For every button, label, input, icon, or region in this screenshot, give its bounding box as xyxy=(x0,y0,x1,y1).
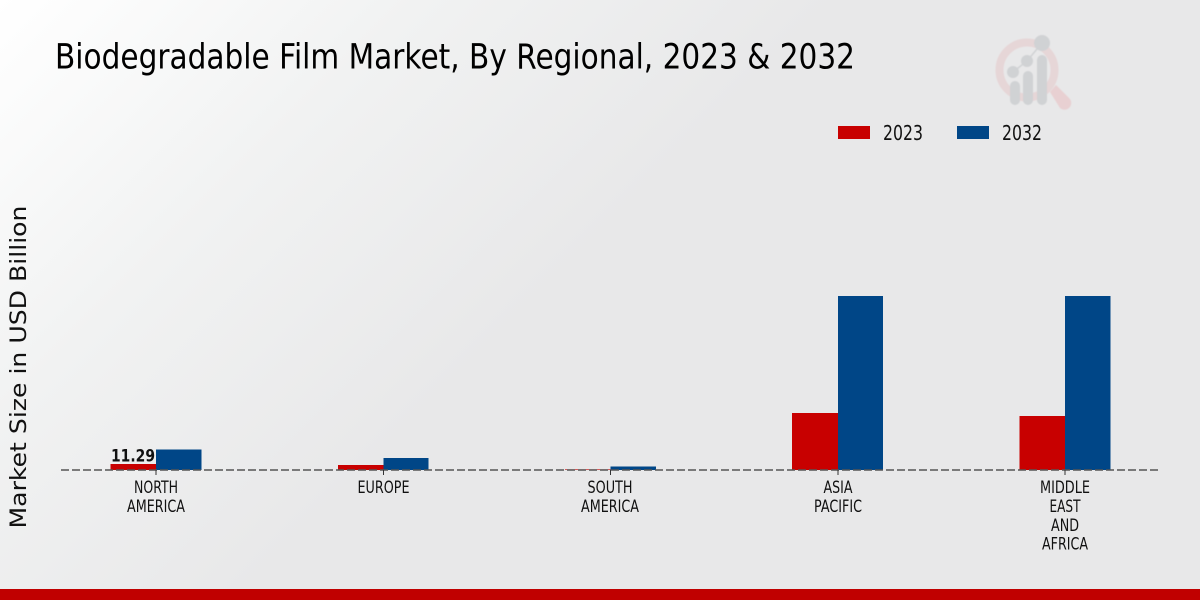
bar chart xyxy=(61,296,1160,475)
y axis label: Market Size in USD Billion xyxy=(6,206,32,528)
label: South America: AMERICA xyxy=(581,497,639,517)
bottom red bar xyxy=(0,589,1200,600)
label: Middle East and Africa: EAST xyxy=(1050,497,1081,517)
icon: watermark logo xyxy=(1000,35,1071,110)
label: North America xyxy=(127,478,185,517)
label: Asia Pacific: ASIA xyxy=(824,478,853,498)
data label: 11.29: 11.29 xyxy=(111,447,155,466)
bars: Asia Pacific xyxy=(792,296,883,470)
label: Middle East and Africa xyxy=(1040,478,1090,554)
label: Middle East and Africa: MIDDLE xyxy=(1040,478,1090,498)
title: Biodegradable Film Market, By Regional, 2023 & 2032 xyxy=(55,38,855,78)
label: South America: SOUTH xyxy=(588,478,632,498)
label: North America: AMERICA xyxy=(127,497,185,517)
bars: Middle East and Africa xyxy=(1020,296,1110,470)
label: Middle East and Africa: AND xyxy=(1051,516,1079,536)
bars: Europe xyxy=(338,458,428,470)
x axis labels xyxy=(127,478,1090,554)
bars: South America xyxy=(565,466,656,470)
legend item: 2032 xyxy=(957,121,1042,145)
label: Europe: EUROPE xyxy=(358,478,410,498)
bars: North America xyxy=(110,450,202,470)
label: Asia Pacific: PACIFIC xyxy=(814,497,862,517)
label: Asia Pacific xyxy=(814,478,862,517)
legend item: 2032: 2032 xyxy=(1002,121,1042,145)
legend item: 2023 xyxy=(838,121,923,145)
label: North America: NORTH xyxy=(134,478,178,498)
legend xyxy=(838,121,1042,145)
label: South America xyxy=(581,478,639,517)
label: Middle East and Africa: AFRICA xyxy=(1042,534,1088,554)
legend item: 2023: 2023 xyxy=(883,121,923,145)
